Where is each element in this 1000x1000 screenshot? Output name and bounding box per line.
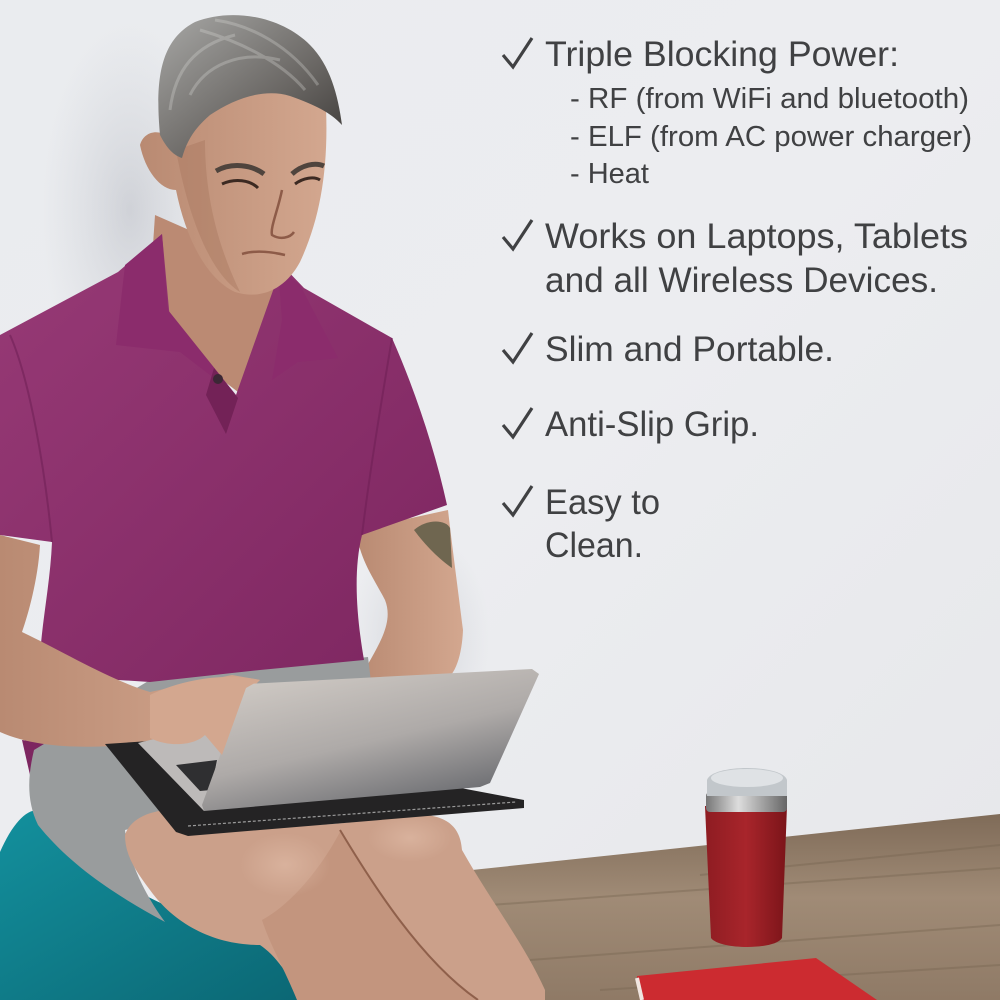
wooden floor bbox=[472, 814, 1000, 1000]
red tumbler bbox=[705, 768, 787, 947]
laptop lid bbox=[202, 669, 539, 811]
feature: triple blocking power bbox=[503, 35, 972, 190]
text line 2: and all Wireless Devices. bbox=[545, 261, 938, 300]
collar left bbox=[116, 234, 236, 395]
cushion bbox=[0, 810, 320, 1000]
black laptop pad bbox=[105, 738, 524, 836]
check icon bbox=[503, 486, 532, 515]
check icon bbox=[503, 38, 532, 67]
sleeve fold bbox=[10, 335, 392, 542]
back arm bbox=[356, 510, 463, 682]
cheek shadow bbox=[176, 140, 240, 292]
text line 1: Works on Laptops, Tablets bbox=[545, 217, 968, 256]
check icon bbox=[503, 220, 532, 249]
hand on laptop bbox=[150, 677, 260, 755]
legs bbox=[125, 809, 545, 1000]
front arm bbox=[0, 535, 260, 755]
shirt bbox=[0, 234, 447, 682]
red notebook bbox=[637, 958, 877, 1000]
sub-item ELF: - ELF (from AC power charger) bbox=[570, 121, 972, 153]
leg shadow bbox=[262, 832, 478, 1000]
feature: slim and portable bbox=[503, 330, 834, 369]
feature: works on devices bbox=[503, 217, 968, 300]
wall shadow behind person bbox=[40, 20, 220, 400]
feature list bbox=[503, 35, 972, 565]
check icon bbox=[503, 408, 532, 437]
text: Anti-Slip Grip. bbox=[545, 405, 759, 444]
knee highlight far bbox=[368, 814, 452, 862]
eyes bbox=[222, 178, 320, 188]
text line 2: Clean. bbox=[545, 526, 643, 565]
feature: anti-slip grip bbox=[503, 405, 759, 444]
shirt button bbox=[213, 374, 223, 384]
lower shirt edge bbox=[22, 740, 60, 775]
placket bbox=[206, 368, 238, 434]
sub-item heat: - Heat bbox=[570, 158, 649, 190]
head bbox=[140, 90, 326, 295]
tattoo bbox=[414, 522, 452, 568]
person bbox=[0, 15, 545, 1000]
nose and mouth bbox=[242, 190, 294, 255]
check icon bbox=[503, 333, 532, 362]
knee highlight bbox=[240, 833, 330, 897]
text: Slim and Portable. bbox=[545, 330, 834, 369]
sub-item RF: - RF (from WiFi and bluetooth) bbox=[570, 83, 969, 115]
shorts bbox=[29, 657, 372, 922]
heading: Triple Blocking Power: bbox=[545, 35, 899, 74]
feature: easy to clean bbox=[503, 483, 660, 565]
keyboard bbox=[176, 760, 217, 791]
hair bbox=[158, 15, 342, 158]
eyebrows bbox=[216, 164, 324, 174]
hair streaks bbox=[170, 20, 318, 110]
neck bbox=[150, 215, 280, 392]
laptop bbox=[138, 669, 539, 811]
collar right bbox=[272, 268, 338, 380]
text line 1: Easy to bbox=[545, 483, 660, 522]
wall shadow by arm bbox=[350, 530, 490, 750]
laptop base bbox=[138, 720, 232, 811]
